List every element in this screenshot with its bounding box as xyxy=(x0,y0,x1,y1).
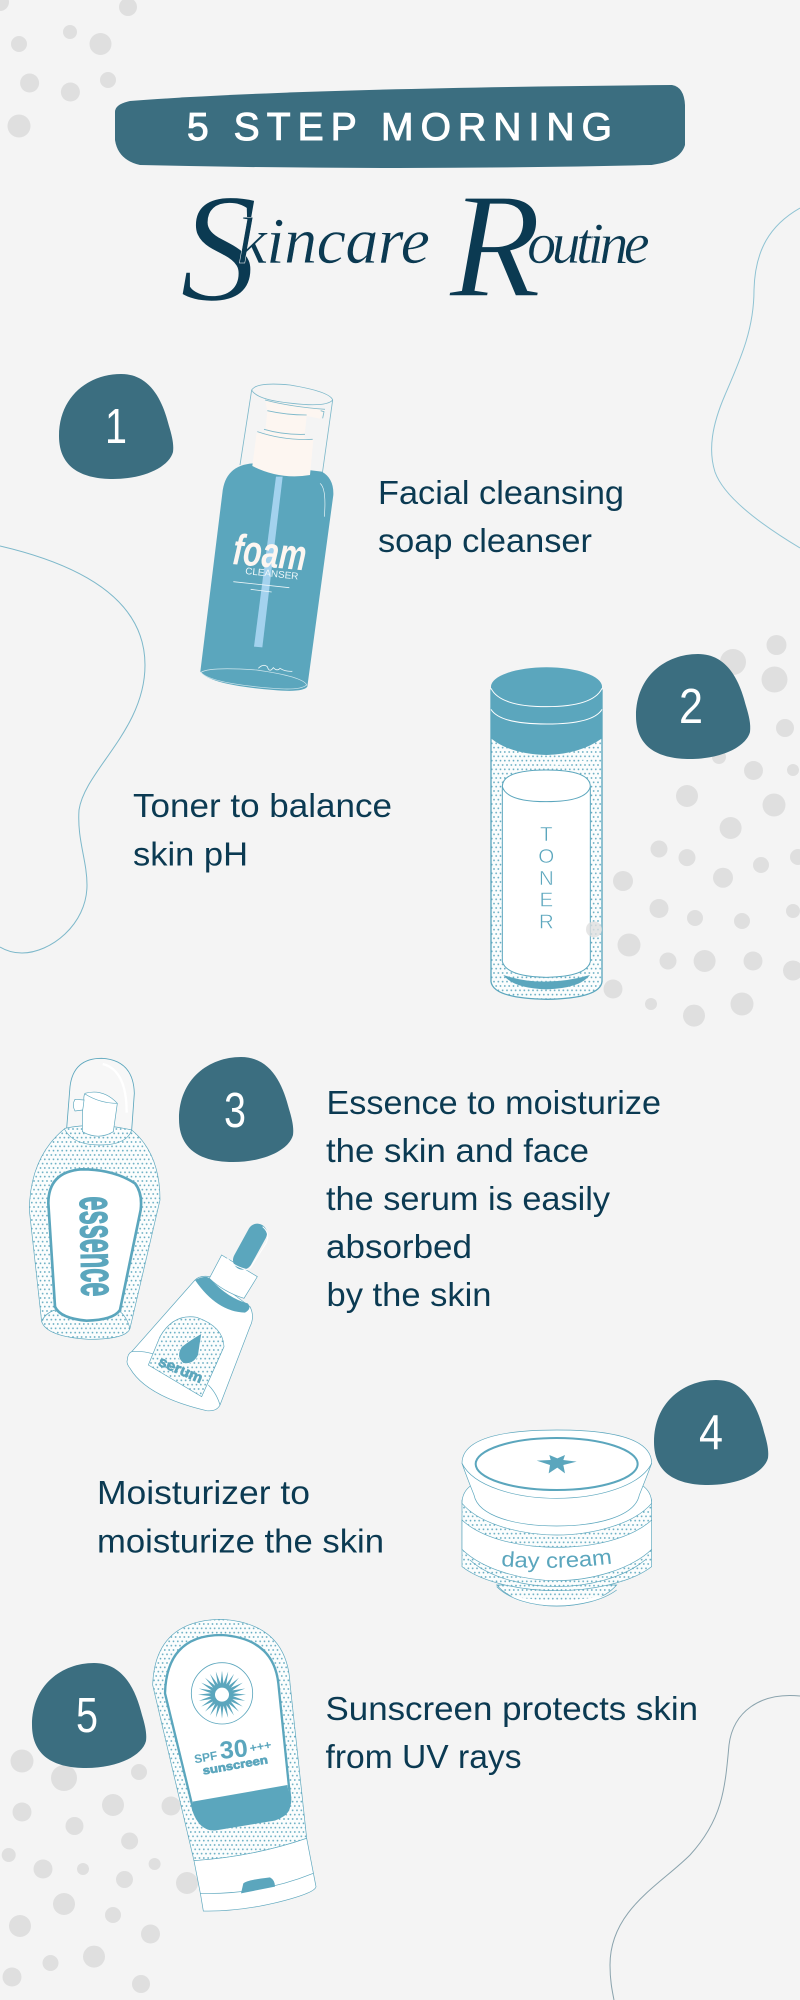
step 2 text xyxy=(133,787,392,872)
icon: essence bottle: essence xyxy=(69,1196,127,1297)
icon: foam cleanser bottle: CLEANSER xyxy=(245,566,299,583)
step 2 number badge xyxy=(636,654,750,759)
step 4 number badge xyxy=(654,1380,768,1485)
step 3 number badge xyxy=(179,1057,293,1162)
step 3 text: Essence to moisturize xyxy=(326,1084,661,1121)
icon: sunscreen tube: 30 xyxy=(218,1735,249,1765)
step 4 text xyxy=(97,1474,384,1560)
icon: sunscreen tube: sunscreen xyxy=(202,1754,269,1778)
step 4 xyxy=(97,1380,768,1606)
step 1 number badge: 1 xyxy=(105,400,127,454)
banner heading: 5 STEP MORNING xyxy=(187,106,612,149)
icon: sunscreen tube xyxy=(153,1619,316,1911)
step 3 text: absorbed xyxy=(326,1228,472,1265)
script title: kincare xyxy=(238,205,429,278)
background curve: lower right xyxy=(610,1695,800,2000)
icon: essence bottle xyxy=(29,1058,160,1339)
icon: foam cleanser bottle: foam xyxy=(231,526,308,580)
icon: toner bottle xyxy=(491,667,602,999)
script title: outine xyxy=(527,211,649,276)
step 3 number badge: 3 xyxy=(224,1084,246,1138)
icon: foam cleanser bottle xyxy=(200,384,333,691)
step 5 number badge xyxy=(32,1663,146,1768)
icon: day cream jar: day cream xyxy=(502,1551,611,1572)
icon: toner bottle: R xyxy=(539,911,554,934)
step 5 text: Sunscreen protects skin xyxy=(326,1690,698,1727)
icon: toner bottle: T xyxy=(540,823,553,846)
icon: toner bottle: E xyxy=(539,889,553,912)
step 3 text: the serum is easily xyxy=(326,1180,611,1217)
step 1 text: soap cleanser xyxy=(378,522,592,559)
step 5 text xyxy=(326,1690,698,1775)
title banner xyxy=(115,85,685,168)
background dots: right cluster xyxy=(604,635,800,1027)
background curve: left xyxy=(0,546,145,953)
step 3 text: by the skin xyxy=(326,1276,492,1313)
icon: serum dropper: serum xyxy=(156,1354,205,1387)
icon: sunscreen tube: +++ xyxy=(248,1738,273,1755)
step 2 xyxy=(133,654,750,999)
step 1 text: Facial cleansing xyxy=(378,474,624,511)
step 5 number badge: 5 xyxy=(76,1689,98,1743)
step 2 text: Toner to balance xyxy=(133,787,392,824)
icon: toner bottle: N xyxy=(539,867,554,890)
icon: toner bottle: O xyxy=(538,845,554,868)
script title: R xyxy=(448,163,541,329)
icon: sunscreen tube: SPF xyxy=(193,1748,218,1766)
step 5 text: from UV rays xyxy=(326,1738,522,1775)
step 1 xyxy=(59,374,624,691)
step 2 number badge: 2 xyxy=(679,680,703,734)
step 1 text xyxy=(378,474,624,559)
step 4 text: Moisturizer to xyxy=(97,1474,310,1511)
background curve: upper right xyxy=(712,208,800,548)
step 4 number badge: 4 xyxy=(699,1406,723,1460)
step 3 text xyxy=(326,1084,661,1313)
script title: S xyxy=(180,162,258,334)
step 2 text: skin pH xyxy=(133,836,248,872)
background dots: bottom left xyxy=(2,1750,198,1993)
step 3 xyxy=(29,1057,661,1411)
step 4 text: moisturize the skin xyxy=(97,1522,384,1560)
step 5 xyxy=(32,1619,698,1911)
step 3 text: the skin and face xyxy=(326,1132,589,1169)
background dots: top left xyxy=(0,0,137,138)
icon: serum dropper xyxy=(127,1227,268,1411)
step 1 number badge xyxy=(59,374,173,479)
icon: day cream jar xyxy=(462,1430,652,1606)
